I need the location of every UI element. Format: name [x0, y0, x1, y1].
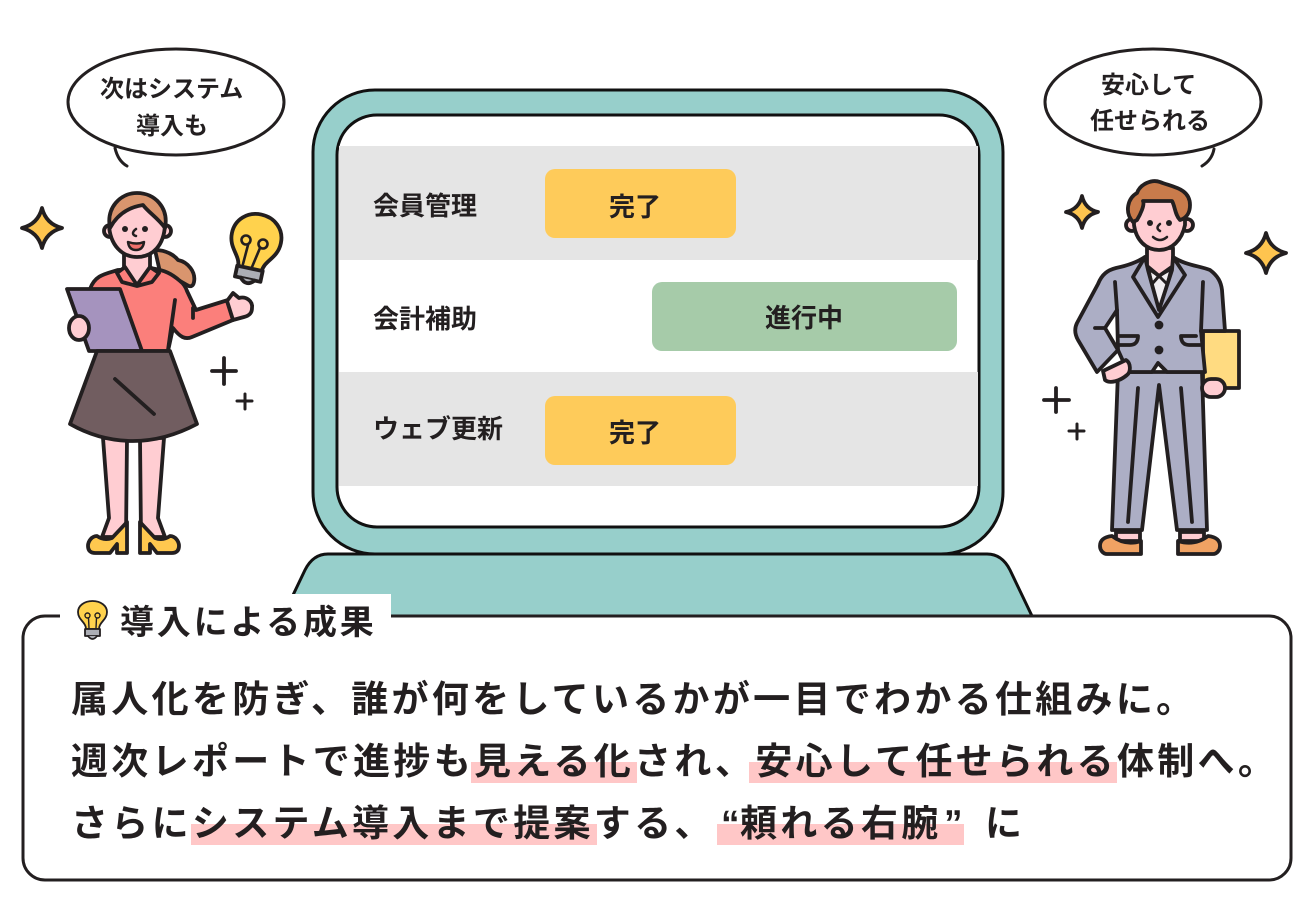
blouse and arm — [90, 268, 233, 351]
collar — [117, 267, 159, 286]
face features — [1147, 220, 1172, 240]
neck — [1147, 248, 1173, 276]
body text line 1: 属人化を防ぎ、誰が何をしているかが一目でわかる仕組みに。 — [71, 679, 1196, 720]
icon: sparkle right small — [1066, 196, 1098, 228]
laptop frame — [313, 90, 1003, 554]
row: ウェブ更新 — [339, 372, 978, 486]
bulb glass — [225, 209, 286, 275]
heading background — [60, 594, 391, 640]
legs and shoes — [88, 438, 127, 553]
speech bubble: right: 任せられる — [1090, 108, 1210, 135]
panel: results — [23, 594, 1291, 880]
ears — [1126, 219, 1138, 231]
body text line 3: に — [985, 803, 1025, 844]
speech bubble: left — [68, 49, 284, 166]
head — [1134, 198, 1185, 250]
hair — [109, 193, 166, 228]
filament — [242, 236, 268, 267]
shirt — [1147, 262, 1173, 315]
character: man — [1075, 181, 1239, 554]
buttons — [1156, 322, 1162, 328]
speech bubble: right: 安心して — [1101, 72, 1196, 99]
speech bubble: left: 導入も — [136, 113, 208, 140]
icon: plus small left — [237, 394, 252, 409]
pockets — [1120, 336, 1200, 345]
icon: sparkle left — [22, 208, 62, 248]
left hand — [1103, 360, 1130, 382]
collar — [1147, 268, 1173, 284]
folder — [1203, 331, 1239, 388]
clipboard — [67, 289, 142, 351]
body text line 3: ” — [944, 803, 966, 844]
row: 会計補助: 会計補助 — [373, 304, 477, 334]
left hand — [69, 316, 89, 340]
socks — [1116, 532, 1140, 541]
icon: sparkle right large — [1246, 233, 1286, 273]
laptop base — [283, 554, 1032, 616]
right shoe — [1178, 536, 1220, 554]
panel frame — [23, 616, 1291, 880]
heading: 導入による成果 — [120, 604, 377, 642]
row: 会員管理: 完了 — [609, 192, 661, 222]
laptop — [283, 90, 1032, 616]
icon: light bulb — [225, 209, 286, 286]
character: woman — [67, 193, 252, 553]
icon: small bulb — [78, 601, 107, 639]
speech bubble: right — [1045, 49, 1261, 166]
right hand — [1202, 379, 1225, 397]
head — [109, 200, 165, 257]
ears — [104, 225, 116, 237]
lapels — [1133, 257, 1185, 317]
row: 会計補助 — [373, 282, 957, 351]
left shoe — [1100, 536, 1141, 554]
icon: plus large left — [212, 358, 236, 384]
row: 会員管理: 会員管理 — [373, 191, 477, 221]
body text line 3: 頼れる右腕 — [740, 803, 942, 844]
neck — [124, 250, 150, 285]
laptop screen — [337, 115, 979, 527]
highlights — [191, 762, 1117, 845]
row: ウェブ更新: 完了 — [609, 418, 661, 448]
icon: plus large right — [1044, 388, 1069, 412]
right leg and shoe — [140, 438, 179, 553]
body text line 3: “ — [721, 803, 743, 844]
hand — [227, 293, 252, 320]
arm gap — [1105, 310, 1118, 350]
skirt — [70, 351, 197, 441]
icon: plus small right — [1069, 424, 1084, 439]
body text line 2: 週次レポートで進捗も見える化され、安心して任せられる体制へ。 — [71, 741, 1278, 782]
ponytail — [155, 250, 194, 286]
trousers — [1112, 372, 1207, 530]
body text line 3: さらにシステム導入まで提案する、 — [71, 803, 715, 844]
row: 会員管理 — [339, 146, 978, 260]
row: ウェブ更新: ウェブ更新 — [373, 414, 503, 444]
row: 会計補助: 進行中 — [765, 303, 843, 333]
jacket — [1075, 257, 1225, 372]
face features — [122, 226, 148, 250]
bulb cap — [234, 266, 263, 286]
speech bubble: left: 次はシステム — [100, 76, 243, 103]
hair — [1128, 181, 1190, 222]
